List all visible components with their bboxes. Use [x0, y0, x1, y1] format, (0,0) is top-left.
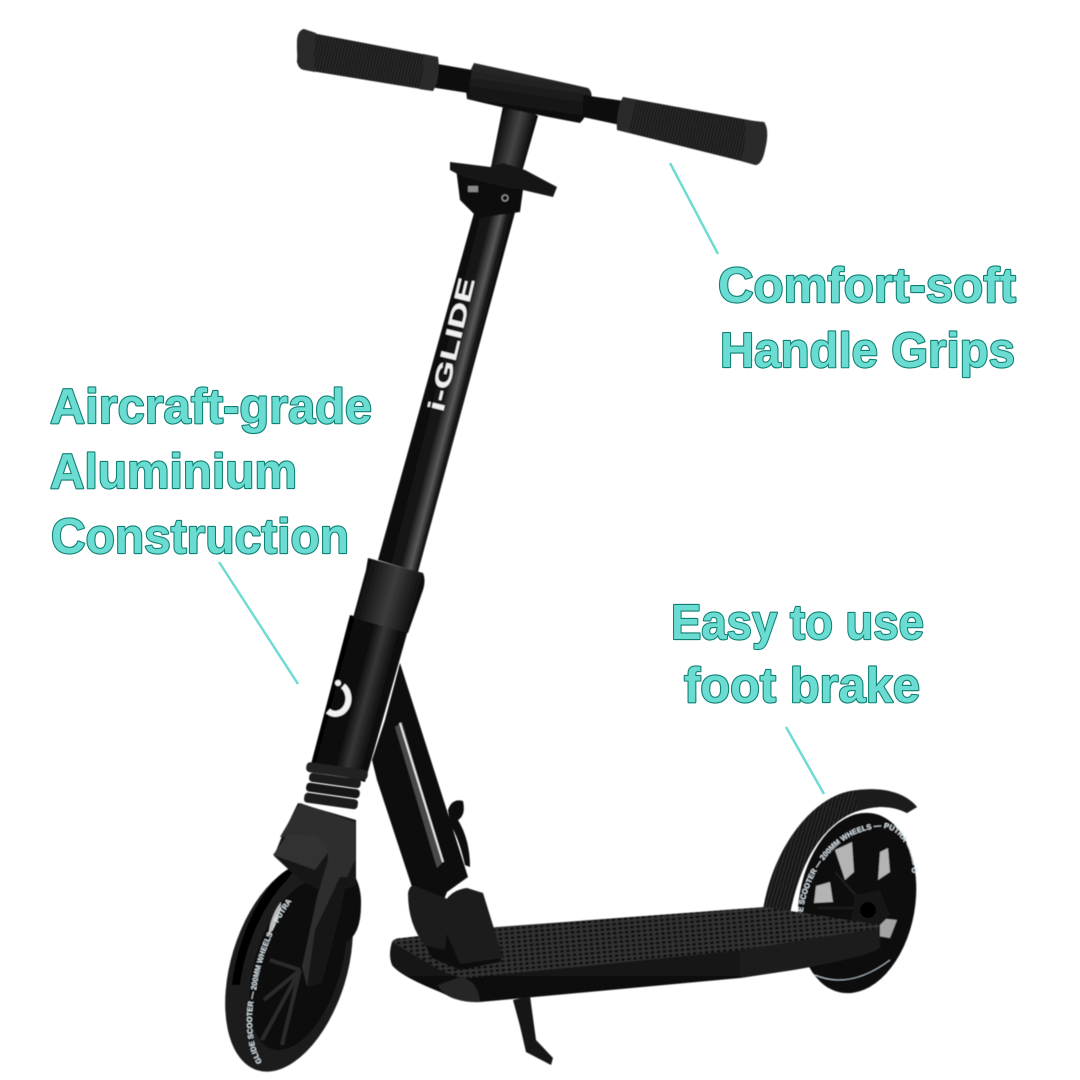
- upper tube: [378, 195, 517, 572]
- handlebar shafts: [430, 63, 624, 125]
- folding clip: [448, 800, 470, 867]
- rear fender: [762, 789, 917, 932]
- front fork: [273, 803, 361, 987]
- scooter illustration: [224, 28, 918, 1072]
- label: aircraft-grade aluminium construction: Aluminium: [50, 445, 297, 499]
- bellows: [304, 762, 368, 810]
- pointer: grips: [670, 163, 718, 254]
- center clamp: [466, 63, 592, 123]
- logo on tube: i-GLIDE: [423, 275, 480, 414]
- pointer: construction: [219, 562, 298, 684]
- label: aircraft-grade aluminium construction: Aircraft-grade: [50, 380, 372, 434]
- logo mark: [328, 680, 348, 714]
- label: easy to use foot brake: Easy to use: [671, 596, 924, 650]
- label: comfort-soft handle grips: Comfort-soft: [718, 259, 1016, 313]
- foot block: [443, 888, 503, 964]
- kickstand: [513, 996, 553, 1065]
- front wheel: [224, 806, 416, 1072]
- label: comfort-soft handle grips: [718, 259, 1016, 378]
- lower tube: [310, 615, 408, 782]
- left grip: [297, 29, 439, 91]
- right grip: [617, 97, 767, 165]
- label: easy to use foot brake: [671, 596, 924, 713]
- stem: [490, 96, 538, 172]
- rear wheel: [797, 812, 918, 994]
- label: aircraft-grade aluminium construction: Construction: [51, 510, 349, 564]
- clamp mechanism: [456, 168, 524, 218]
- fender tail: [855, 789, 917, 813]
- collar: [353, 558, 424, 633]
- pointer: foot brake: [786, 727, 824, 794]
- label: aircraft-grade aluminium construction: [50, 380, 372, 564]
- base clamp band: [408, 886, 503, 970]
- rear wheel: GLIDE SCOOTER — 200MM WHEELS — PUTRA ——— O: [797, 822, 918, 914]
- label: easy to use foot brake: foot brake: [684, 659, 920, 713]
- deck: [390, 907, 880, 1002]
- clamp flange: [450, 162, 557, 197]
- label: comfort-soft handle grips: Handle Grips: [720, 324, 1015, 378]
- folding strut: [372, 663, 468, 915]
- front wheel: GLIDE SCOOTER — 200MM WHEELS — PUTRA: [246, 899, 292, 1064]
